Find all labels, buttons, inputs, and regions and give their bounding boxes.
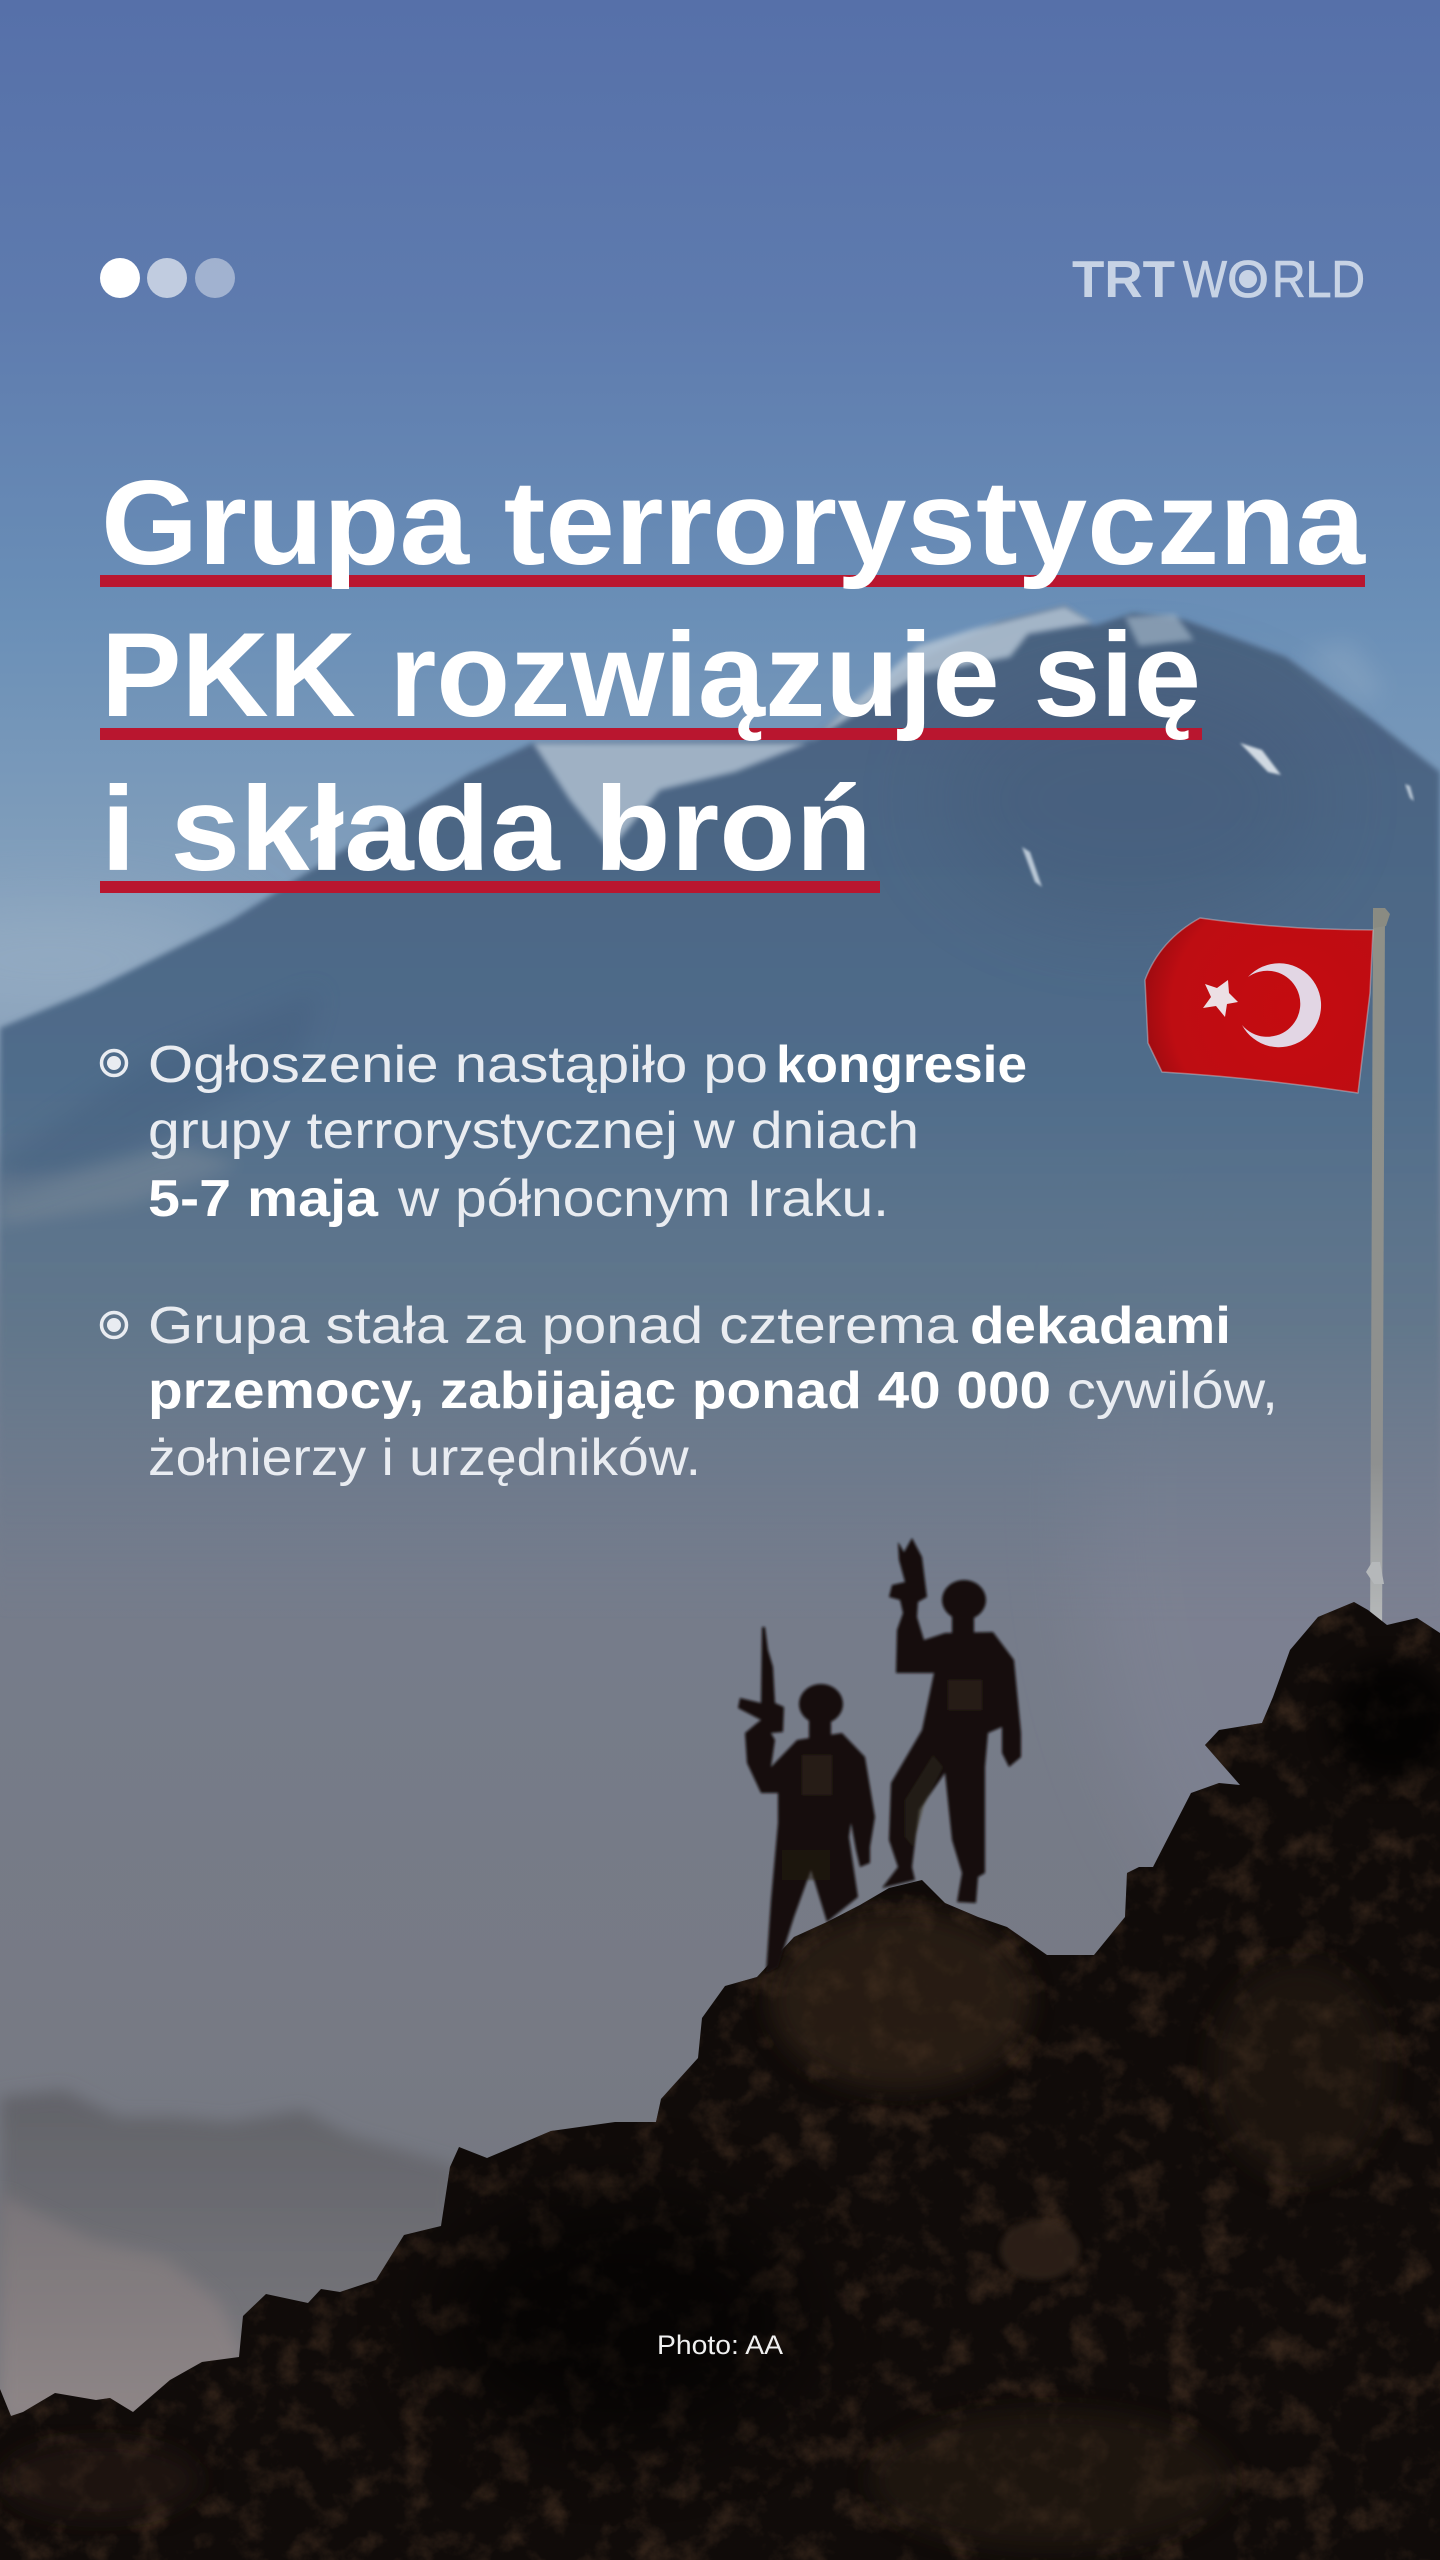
- bullet paragraph 2: [102, 1297, 1278, 1487]
- bullet paragraph 1: grupy terrorystycznej w dniach: [148, 1102, 919, 1160]
- icon: star: [1203, 980, 1238, 1017]
- progress dots: [100, 258, 235, 298]
- soldier: right: [882, 1538, 1021, 1903]
- bullet paragraph 2: cywilów,: [1067, 1362, 1278, 1420]
- bullet paragraph 1: Ogłoszenie nastąpiło po: [148, 1036, 768, 1094]
- bullet paragraph 2: żołnierzy i urzędników.: [148, 1429, 701, 1487]
- bullet paragraph 2: przemocy, zabijając ponad 40 000: [148, 1362, 1051, 1420]
- bullet paragraph 1: 5-7 maja: [148, 1170, 379, 1228]
- logo: TRT World: O: [1227, 251, 1269, 309]
- distant hills, bottom left: [0, 2090, 459, 2420]
- soldier: left: [738, 1627, 875, 1973]
- logo: TRT World: RLD: [1272, 251, 1365, 309]
- icon: bullet 1: [102, 1050, 126, 1076]
- bullet paragraph 1: [102, 1036, 1027, 1228]
- logo: TRT World: W: [1183, 251, 1227, 309]
- bullet paragraph 2: dekadami: [970, 1297, 1231, 1355]
- logo: TRT World: TRT: [1072, 251, 1175, 309]
- icon: crescent: [1242, 963, 1321, 1047]
- foreground rock: [0, 1600, 1440, 2560]
- headline: PKK rozwiązuje się: [101, 608, 1201, 742]
- bullet paragraph 2: Grupa stała za ponad czterema: [148, 1297, 958, 1355]
- headline: Grupa terrorystyczna: [101, 456, 1366, 590]
- icon: bullet 2: [102, 1312, 126, 1338]
- bullet paragraph 1: w północnym Iraku.: [397, 1170, 889, 1228]
- logo: TRT World: [1072, 251, 1365, 309]
- flag pole: [1366, 908, 1390, 1648]
- bullet paragraph 1: kongresie: [776, 1036, 1027, 1094]
- headline: i składa broń: [101, 762, 872, 896]
- photo credit: Photo: AA: [657, 2330, 783, 2360]
- mountain: [0, 606, 1440, 1700]
- headline: [100, 456, 1366, 896]
- Turkish flag: [1145, 918, 1373, 1093]
